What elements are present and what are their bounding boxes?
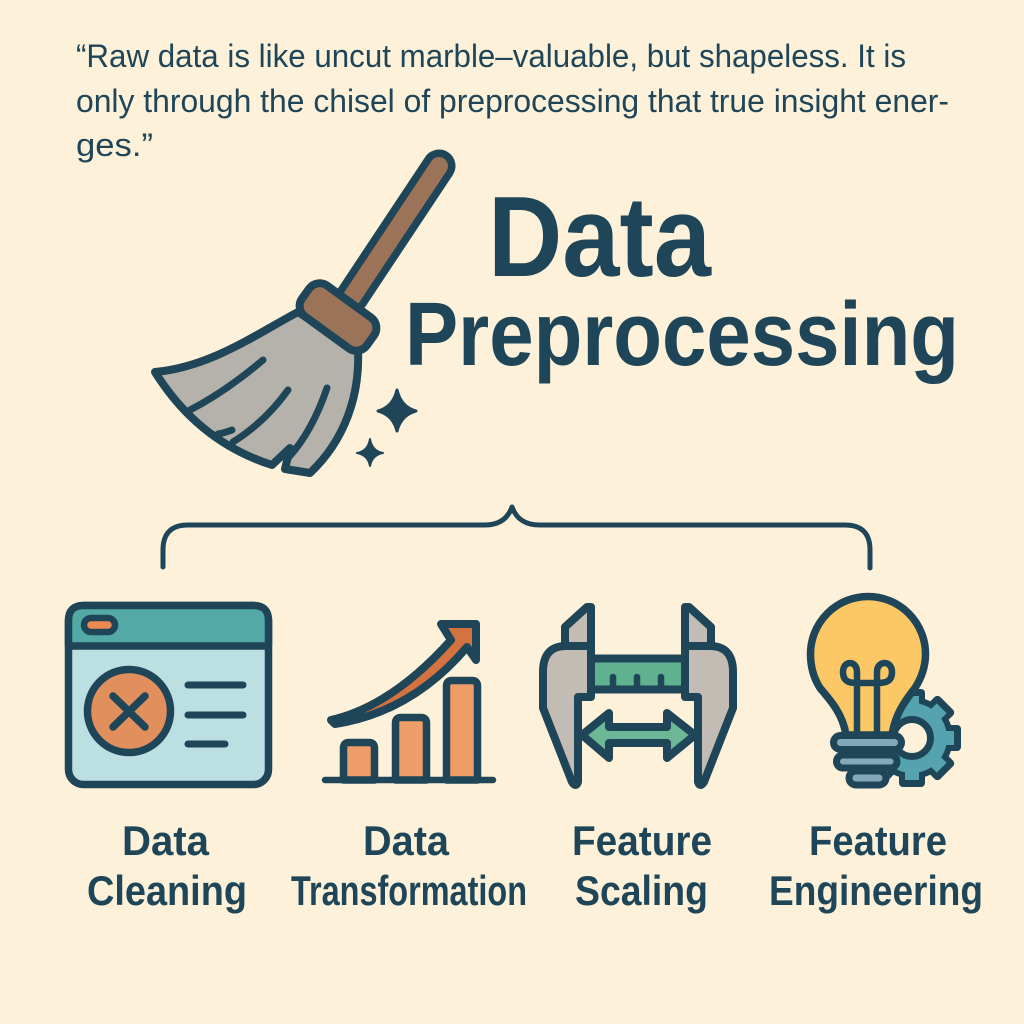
rising arrow bbox=[331, 624, 476, 724]
double arrow bbox=[582, 713, 695, 758]
quote text: ges.” bbox=[76, 127, 153, 163]
right jaw bbox=[685, 646, 733, 785]
label: data cleaning: Data bbox=[122, 817, 210, 864]
icon: broom bbox=[155, 166, 439, 473]
title bbox=[405, 174, 959, 385]
label: feature engineering: Feature bbox=[809, 817, 947, 864]
label: feature scaling: Feature bbox=[572, 817, 712, 864]
filament bbox=[843, 663, 892, 733]
bars bbox=[344, 680, 478, 780]
label: data transformation: Data bbox=[363, 817, 450, 864]
broom handle bbox=[352, 166, 439, 297]
label: feature engineering: Engineering bbox=[769, 867, 983, 914]
label: feature engineering bbox=[769, 817, 983, 914]
quote text: only through the chisel of preprocessing that true insight ener- bbox=[76, 83, 949, 119]
icon: feature engineering bulb and gear bbox=[810, 596, 961, 787]
quote text bbox=[76, 38, 949, 163]
icon: data transformation chart bbox=[325, 624, 493, 780]
broom ferrule bbox=[294, 278, 382, 356]
error cross bbox=[113, 696, 145, 727]
label: data cleaning bbox=[87, 817, 247, 914]
label: data transformation bbox=[291, 817, 527, 914]
ruler ticks bbox=[613, 677, 661, 689]
window header bbox=[68, 606, 268, 646]
brace connector bbox=[163, 507, 870, 568]
error circle bbox=[88, 670, 170, 752]
quote text: “Raw data is like uncut marble–valuable, but shapeless. It is bbox=[76, 38, 906, 74]
icon: feature scaling caliper bbox=[543, 607, 733, 785]
window body bbox=[68, 606, 268, 784]
bulb base bbox=[834, 736, 902, 785]
label: data transformation: Transformation bbox=[291, 867, 527, 914]
bulb glass bbox=[810, 596, 926, 735]
title: Preprocessing bbox=[405, 285, 959, 385]
gear bbox=[863, 689, 961, 787]
broom bristles bbox=[155, 312, 358, 473]
ruler bbox=[591, 658, 685, 690]
bristle strands bbox=[190, 360, 327, 458]
axis bbox=[325, 777, 493, 783]
label: feature scaling: Scaling bbox=[575, 867, 708, 914]
icon: data cleaning window bbox=[68, 606, 268, 784]
label: data cleaning: Cleaning bbox=[87, 867, 247, 914]
upper jaws bbox=[565, 607, 711, 646]
text lines bbox=[188, 685, 243, 744]
icon: small sparkle bbox=[357, 439, 383, 466]
icon: large sparkle bbox=[378, 390, 416, 431]
window pill bbox=[84, 618, 115, 632]
label: feature scaling bbox=[572, 817, 712, 914]
left jaw bbox=[543, 646, 591, 785]
title: Data bbox=[488, 174, 712, 301]
